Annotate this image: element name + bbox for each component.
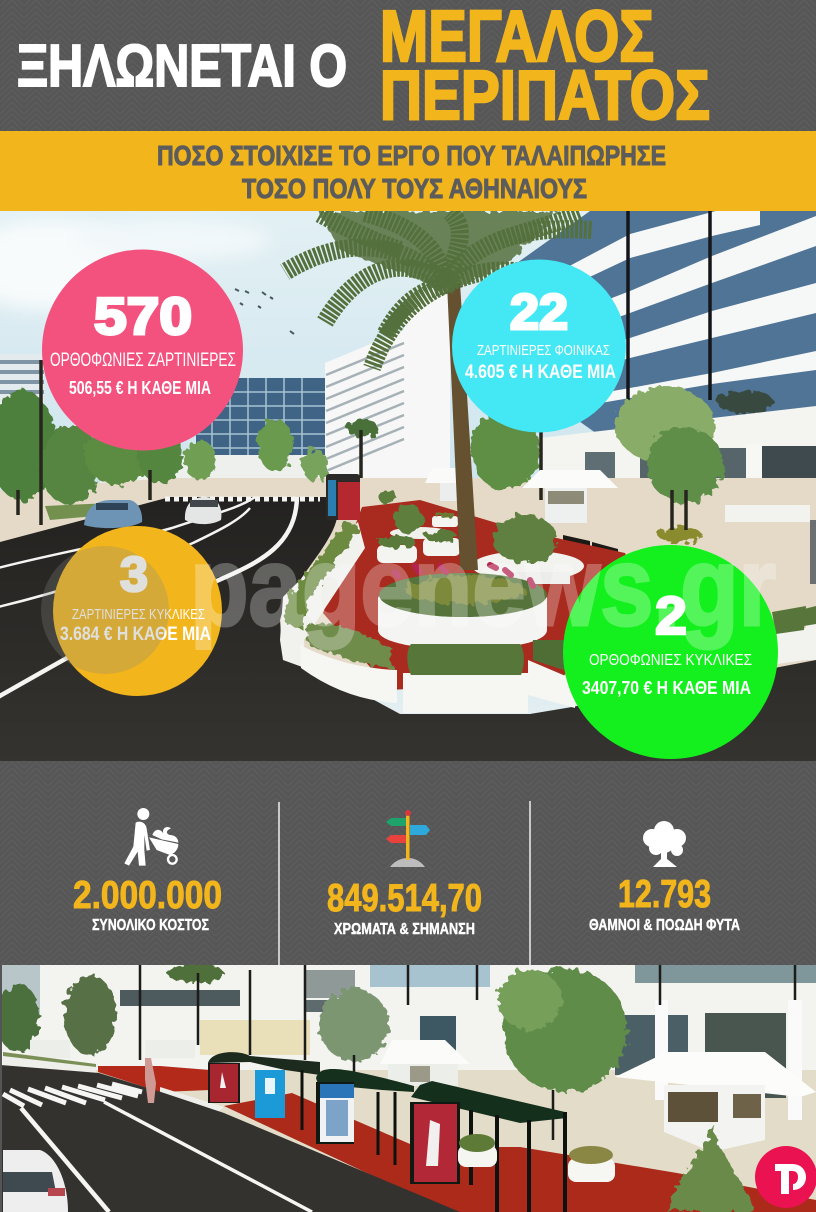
- bus shelters: [208, 1052, 567, 1212]
- label: ΟΡΘΟΦΩΝΙΕΣ ΖΑΡΤΙΝΙΕΡΕΣ: [50, 350, 236, 371]
- circle: pink: [42, 250, 243, 450]
- circle: green: [563, 545, 778, 759]
- road markings: [0, 497, 320, 697]
- watermark: [41, 524, 776, 674]
- road markings: [3, 1084, 312, 1212]
- road: [0, 497, 816, 761]
- pedestrian at the edge: [810, 520, 816, 584]
- poles: [140, 965, 795, 1140]
- foreground palm: [668, 1122, 755, 1212]
- palm tree: [285, 211, 592, 570]
- stat label: ΧΡΩΜΑΤΑ & ΣΗΜΑΝΣΗ: [334, 921, 475, 938]
- subtitle line 2: ΤΟΣΟ ΠΟΛΥ ΤΟΥΣ ΑΘΗΝΑΙΟΥΣ: [242, 173, 587, 204]
- label: ΟΡΘΟΦΩΝΙΕΣ ΚΥΚΛΙΚΕΣ: [589, 652, 752, 669]
- logo letter: [775, 1164, 806, 1194]
- subtitle line 1: ΠΟΣΟ ΣΤΟΙΧΙΣΕ ΤΟ ΕΡΓΟ ΠΟΥ ΤΑΛΑΙΠΩΡΗΣΕ: [157, 140, 666, 171]
- main rendering photo: [0, 199, 816, 761]
- long hedge planter: [280, 522, 365, 668]
- hedge planters front: [300, 606, 816, 713]
- stat: paints and signage: 849.514,70: [327, 877, 482, 920]
- circle: yellow: [53, 526, 222, 696]
- price: 3.684 € Η ΚΑΘΕ ΜΙΑ: [60, 624, 211, 645]
- stat: plants: 12.793: [618, 873, 711, 916]
- red median: [323, 500, 640, 690]
- stat: plants: [589, 873, 740, 934]
- left building: [0, 354, 44, 404]
- stat: paints and signage: [327, 877, 482, 938]
- header panel: [0, 0, 816, 134]
- glass building: [100, 378, 325, 483]
- stat: total cost: [73, 874, 222, 934]
- label: ΖΑΡΤΙΝΙΕΡΕΣ ΚΥΚΛΙΚΕΣ: [72, 606, 205, 623]
- cars: [84, 497, 221, 528]
- stat label: ΣΥΝΟΛΙΚΟ ΚΟΣΤΟΣ: [92, 917, 209, 934]
- sidewalk: [0, 478, 816, 680]
- icon: person with wheelbarrow: [124, 808, 178, 866]
- background buildings: [0, 965, 816, 1120]
- birds: [235, 289, 294, 334]
- kiosks: [425, 468, 810, 552]
- number 3: 3: [120, 548, 148, 602]
- road: [0, 1065, 460, 1212]
- title white part: ΞΗΛΩΝΕΤΑΙ Ο: [17, 33, 347, 99]
- icon: tree: [643, 821, 686, 867]
- number 22: 22: [510, 284, 568, 340]
- title yellow line 2: ΠΕΡΙΠΑΤΟΣ: [380, 56, 710, 134]
- subtitle band: [0, 131, 816, 211]
- price: 4.605 € Η ΚΑΘΕ ΜΙΑ: [465, 362, 616, 383]
- kiosks: [30, 1040, 816, 1152]
- number 570: 570: [94, 288, 192, 346]
- price: 3407,70 € Η ΚΑΘΕ ΜΙΑ: [582, 678, 751, 698]
- stat: total cost: 2.000.000: [73, 874, 222, 917]
- stat label: ΘΑΜΝΟΙ & ΠΟΩΔΗ ΦΥΤΑ: [589, 917, 740, 934]
- number 2: 2: [655, 586, 687, 646]
- round flower planter: [378, 565, 547, 650]
- price: 506,55 € Η ΚΑΘΕ ΜΙΑ: [69, 378, 211, 398]
- bottom rendering photo: [0, 963, 816, 1212]
- icon: signpost: [386, 810, 430, 867]
- car: [3, 1150, 68, 1212]
- label: ΖΑΡΤΙΝΙΕΡΕΣ ΦΟΙΝΙΚΑΣ: [477, 342, 610, 359]
- logo badge: [755, 1146, 816, 1208]
- background trees: [0, 963, 627, 1092]
- stats panel: [0, 761, 816, 965]
- tower ground floor: [542, 406, 816, 478]
- small planters: [377, 489, 584, 584]
- striped tower: [465, 211, 816, 432]
- trees: [0, 387, 723, 543]
- dark bush behind tree: [717, 390, 773, 414]
- round planters: [458, 1134, 615, 1182]
- pedestrian: [145, 1058, 156, 1103]
- white mid building: [325, 285, 450, 490]
- circle: cyan: [452, 260, 626, 432]
- median strip with red paving: [3, 1052, 816, 1212]
- bus shelter: [326, 474, 360, 520]
